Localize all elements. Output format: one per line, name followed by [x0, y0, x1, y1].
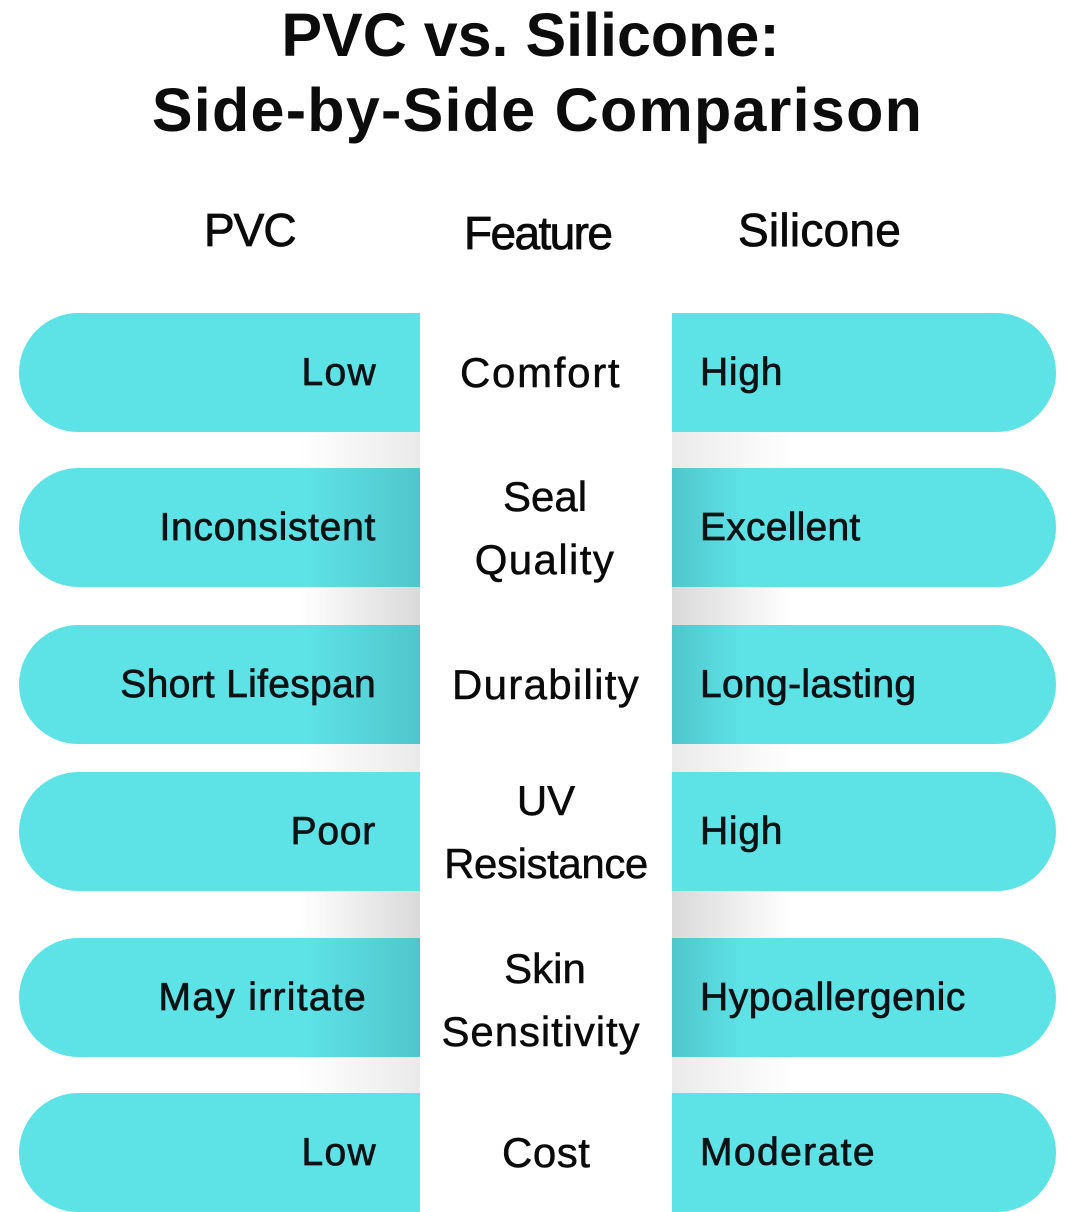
feature: Cost: Cost	[502, 1129, 590, 1176]
feature: Durability: Durability	[452, 661, 640, 708]
row: Cost	[19, 1093, 1056, 1212]
PVC pill: Poor: Poor	[291, 810, 376, 853]
Silicone pill: High: High	[700, 810, 783, 853]
PVC pill: Short Lifespan: Short Lifespan	[120, 663, 376, 706]
PVC pill: Low: Low	[302, 351, 377, 394]
Silicone pill: High: High	[700, 351, 783, 394]
Silicone pill: Long-lasting: Long-lasting	[700, 663, 916, 706]
Silicone pill: Excellent: Excellent	[700, 506, 860, 549]
column heading: PVC: PVC	[204, 204, 296, 256]
feature: Comfort: Comfort	[460, 349, 621, 396]
PVC pill: Low: Low	[302, 1131, 377, 1174]
Silicone pill: Hypoallergenic	[672, 938, 1056, 1057]
feature: Seal Quality: Seal	[503, 473, 587, 520]
Silicone pill: High	[672, 772, 1056, 891]
feature: Skin Sensitivity	[442, 945, 640, 1055]
PVC pill: Poor	[19, 772, 420, 891]
row: UV Resistance	[19, 772, 1056, 891]
PVC pill: May irritate	[19, 938, 420, 1057]
Silicone pill: Long-lasting	[672, 625, 1056, 744]
Silicone pill: High	[672, 313, 1056, 432]
Silicone pill: Excellent	[672, 468, 1056, 587]
PVC pill: May irritate: May irritate	[159, 976, 367, 1019]
Silicone pill: Moderate: Moderate	[700, 1131, 876, 1174]
row: Seal Quality	[19, 468, 1056, 587]
title: PVC vs. Silicone:	[281, 1, 780, 69]
feature: UV Resistance: Resistance	[444, 840, 648, 887]
feature: Skin Sensitivity: Sensitivity	[442, 1008, 640, 1055]
PVC pill: Low	[19, 313, 420, 432]
feature: Skin Sensitivity: Skin	[504, 945, 586, 992]
Silicone pill: Hypoallergenic: Hypoallergenic	[700, 976, 966, 1019]
feature: UV Resistance	[444, 777, 648, 887]
title: Side-by-Side Comparison	[152, 76, 923, 144]
Silicone pill: Moderate	[672, 1093, 1056, 1212]
row: Comfort	[19, 313, 1056, 432]
PVC pill: Inconsistent: Inconsistent	[159, 506, 376, 549]
feature: Seal Quality	[475, 473, 615, 583]
column heading: Feature: Feature	[464, 207, 611, 259]
row: Skin Sensitivity	[19, 938, 1056, 1057]
column heading: Silicone: Silicone	[738, 204, 901, 256]
title	[152, 1, 923, 144]
PVC pill: Inconsistent	[19, 468, 420, 587]
feature: UV Resistance: UV	[517, 777, 575, 824]
PVC pill: Low	[19, 1093, 420, 1212]
feature: Seal Quality: Quality	[475, 536, 615, 583]
row: Durability	[19, 625, 1056, 744]
PVC pill: Short Lifespan	[19, 625, 420, 744]
